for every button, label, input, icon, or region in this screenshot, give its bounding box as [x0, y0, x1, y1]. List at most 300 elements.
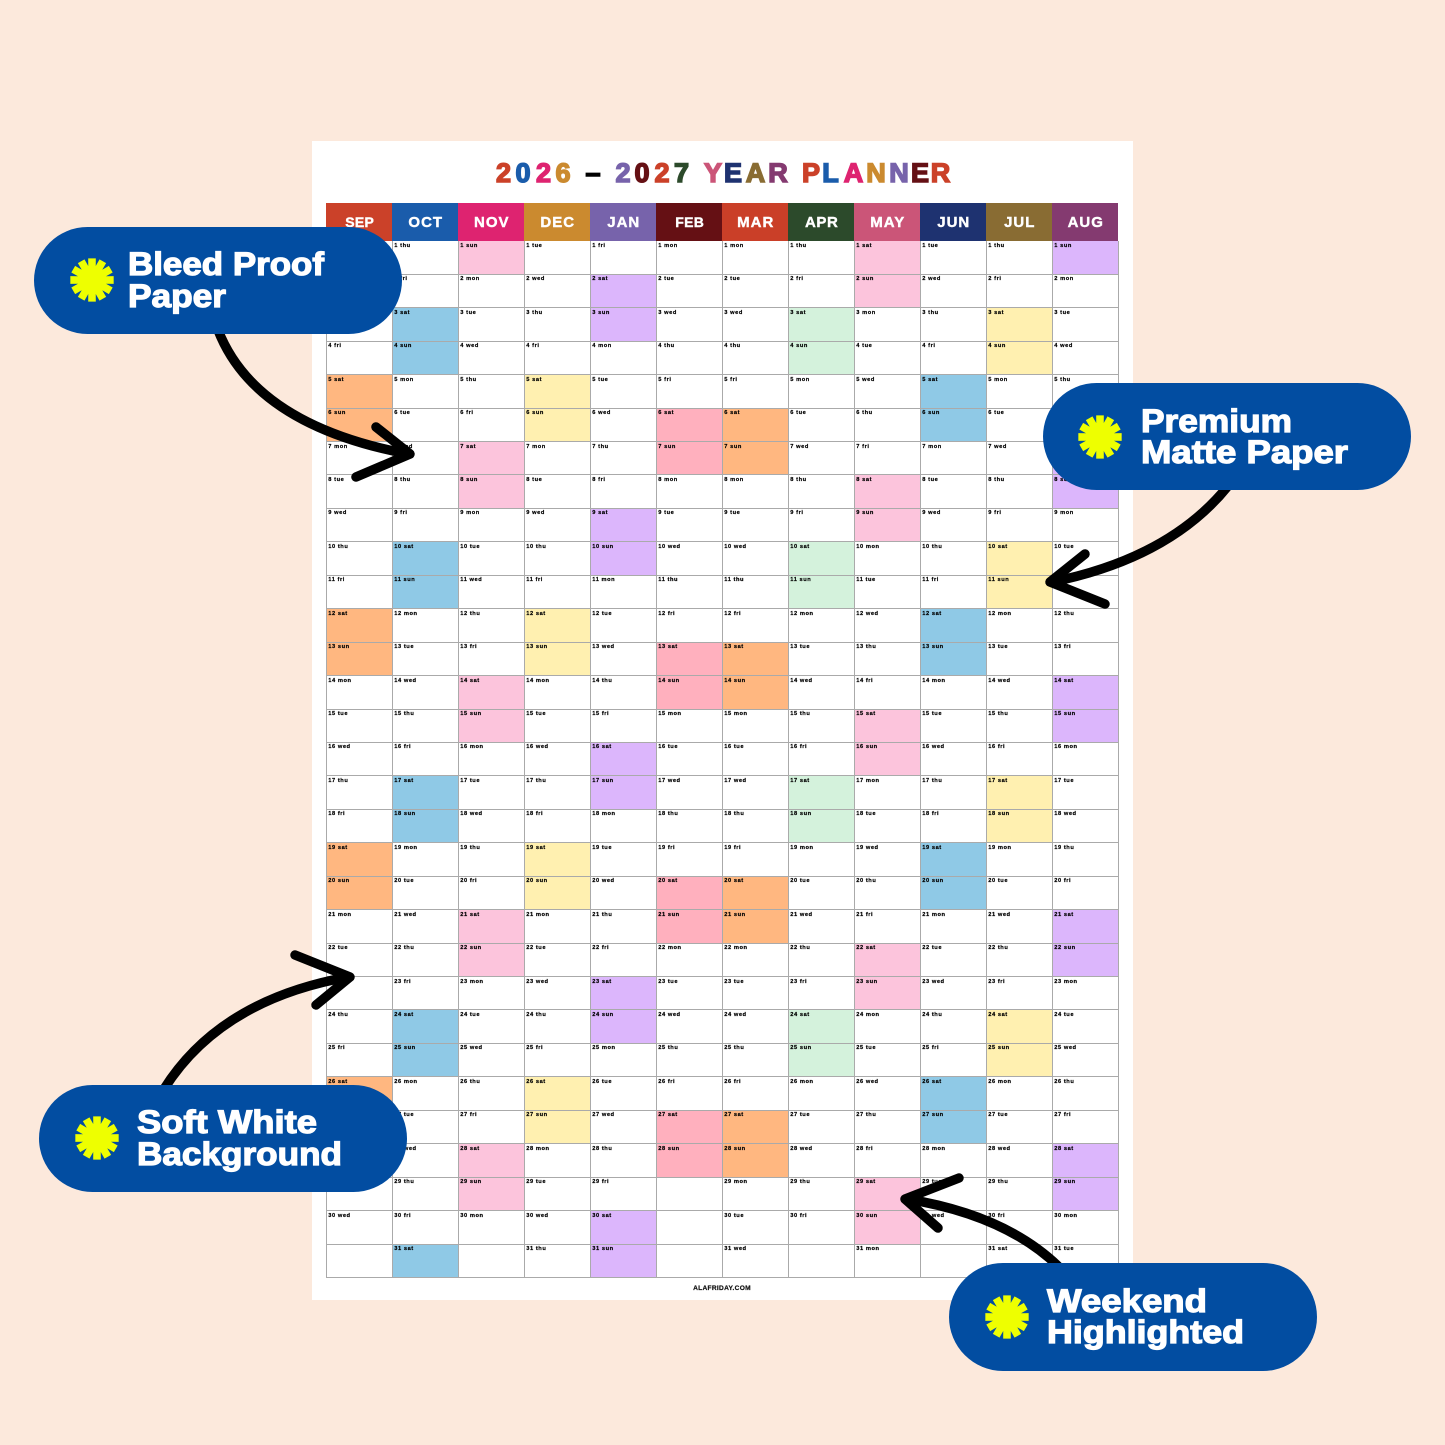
column: January: 3 sun — [592, 310, 610, 316]
title: P — [802, 158, 820, 188]
column: February: 19 fri — [658, 845, 675, 851]
column: May: 25 tue — [856, 1045, 876, 1051]
column: June: 18 fri — [922, 811, 939, 817]
column: June: 12 sat — [922, 611, 942, 617]
column: July: 4 sun — [988, 343, 1006, 349]
column: August: 14 sat — [1054, 678, 1074, 684]
column: December: 13 sun — [526, 644, 548, 650]
column: June: 23 wed — [922, 979, 945, 985]
column: July: 31 sat — [988, 1246, 1008, 1252]
column: December: 3 thu — [526, 310, 543, 316]
column: March: 15 mon — [724, 711, 748, 717]
column: April: 9 fri — [790, 510, 803, 516]
column: March: 9 tue — [724, 510, 740, 516]
column: November: 20 fri — [460, 878, 477, 884]
column: January: 8 fri — [592, 477, 605, 483]
column: November: 23 mon — [460, 979, 484, 985]
column: December: 21 mon — [526, 912, 550, 918]
column: July: 14 wed — [988, 678, 1011, 684]
column: October: 10 sat — [394, 544, 414, 550]
column: February: 13 sat — [658, 644, 678, 650]
column: December: 26 sat — [526, 1079, 546, 1085]
column: October: 21 wed — [394, 912, 417, 918]
column: July: 25 sun — [988, 1045, 1010, 1051]
column: April: 5 mon — [790, 377, 810, 383]
column: September: 2 wed — [328, 276, 347, 282]
column: November: 22 sun — [460, 945, 482, 951]
column: August: 30 mon — [1054, 1213, 1078, 1219]
column: January: 14 thu — [592, 678, 612, 684]
column: November — [458, 203, 524, 1278]
column: August: 24 tue — [1054, 1012, 1074, 1018]
column: August: 5 thu — [1054, 377, 1071, 383]
column: November: 16 mon — [460, 744, 484, 750]
column: October: 27 tue — [394, 1112, 414, 1118]
icon: yellow burst — [70, 258, 114, 302]
column: May: 19 wed — [856, 845, 879, 851]
column: April: 25 sun — [790, 1045, 812, 1051]
column: July: 23 fri — [988, 979, 1005, 985]
column: April: 6 tue — [790, 410, 806, 416]
column: May: 9 sun — [856, 510, 874, 516]
arrow: to paper from Soft White — [164, 955, 350, 1089]
column: February: 3 wed — [658, 310, 677, 316]
column: December: 27 sun — [526, 1112, 548, 1118]
column: March: 8 mon — [724, 477, 744, 483]
column: October: 7 wed — [394, 444, 413, 450]
column: September: 21 mon — [328, 912, 352, 918]
column: July: 22 thu — [988, 945, 1008, 951]
column: February: 5 fri — [658, 377, 671, 383]
column: September: 1 tue — [328, 243, 344, 249]
icon: yellow burst — [75, 1116, 119, 1160]
column: August: 15 sun — [1054, 711, 1076, 717]
column: February — [656, 203, 722, 1278]
column: November: 21 sat — [460, 912, 480, 918]
column: July: 15 thu — [988, 711, 1008, 717]
column: May: 7 fri — [856, 444, 869, 450]
column: September: 25 fri — [328, 1045, 345, 1051]
column: November: 14 sat — [460, 678, 480, 684]
column: June: 21 mon — [922, 912, 946, 918]
column: March: 7 sun — [724, 444, 742, 450]
column: April: 7 wed — [790, 444, 809, 450]
column: January: 12 tue — [592, 611, 612, 617]
column: October: 4 sun — [394, 343, 412, 349]
column: August: 31 tue — [1054, 1246, 1074, 1252]
column: March: 13 sat — [724, 644, 744, 650]
callout text: Highlighted — [1047, 1314, 1244, 1350]
column: March: 11 thu — [724, 577, 744, 583]
title: E — [911, 158, 929, 188]
column: November: 25 wed — [460, 1045, 483, 1051]
icon: yellow burst — [985, 1295, 1029, 1339]
column: July: 2 fri — [988, 276, 1001, 282]
column: April: 15 thu — [790, 711, 810, 717]
column: January: JAN — [607, 214, 640, 231]
column: March: 2 tue — [724, 276, 740, 282]
column: July: 28 wed — [988, 1146, 1011, 1152]
column: May — [854, 203, 920, 1278]
column: February: 24 wed — [658, 1012, 681, 1018]
column: September: 7 mon — [328, 444, 348, 450]
column: January: 19 tue — [592, 845, 612, 851]
column: January — [590, 203, 656, 1278]
column: December: 18 fri — [526, 811, 543, 817]
column: June: 10 thu — [922, 544, 942, 550]
title: Y — [704, 158, 722, 188]
column: September: 23 wed — [328, 979, 351, 985]
title: 0 — [634, 158, 650, 188]
column: July: 17 sat — [988, 778, 1008, 784]
column: November: 3 tue — [460, 310, 476, 316]
column: January: 1 fri — [592, 243, 605, 249]
column: January: 29 fri — [592, 1179, 609, 1185]
column: October: 18 sun — [394, 811, 416, 817]
column: February: 1 mon — [658, 243, 678, 249]
column: December: 11 fri — [526, 577, 543, 583]
column: August: AUG — [1068, 214, 1104, 231]
column: March: 3 wed — [724, 310, 743, 316]
column: May: 2 sun — [856, 276, 874, 282]
column: November: 6 fri — [460, 410, 473, 416]
column: October: 8 thu — [394, 477, 411, 483]
column: October: 26 mon — [394, 1079, 418, 1085]
column: August: 22 sun — [1054, 945, 1076, 951]
title: 7 — [674, 158, 689, 188]
column: February: 10 wed — [658, 544, 681, 550]
column: August: 13 fri — [1054, 644, 1071, 650]
column: November: 9 mon — [460, 510, 480, 516]
column: August: 25 wed — [1054, 1045, 1077, 1051]
column: August: 2 mon — [1054, 276, 1074, 282]
column: August: 20 fri — [1054, 878, 1071, 884]
column: June: 22 tue — [922, 945, 942, 951]
column: May: 13 thu — [856, 644, 876, 650]
callout text: Background — [137, 1136, 342, 1172]
column: September: 20 sun — [328, 878, 350, 884]
column: June: 30 wed — [922, 1213, 945, 1219]
column: September: 13 sun — [328, 644, 350, 650]
column: June: 11 fri — [922, 577, 939, 583]
column: March: 31 wed — [724, 1246, 747, 1252]
callout text: Bleed Proof — [128, 246, 324, 282]
callout text: Premium — [1141, 403, 1292, 439]
title: R — [931, 158, 950, 188]
callout: Bleed Proof Paper — [34, 227, 402, 334]
column: June: 13 sun — [922, 644, 944, 650]
column: January: 17 sun — [592, 778, 614, 784]
column: November: 29 sun — [460, 1179, 482, 1185]
column: March: 25 thu — [724, 1045, 744, 1051]
column: November: 5 thu — [460, 377, 477, 383]
column: January: 31 sun — [592, 1246, 614, 1252]
title: 2 — [536, 158, 551, 188]
callout: Premium Matte Paper — [1043, 383, 1411, 490]
title: – — [585, 158, 601, 188]
column: June: 8 tue — [922, 477, 938, 483]
column: December: 12 sat — [526, 611, 546, 617]
column: December: 19 sat — [526, 845, 546, 851]
column: May: 14 fri — [856, 678, 873, 684]
column: September: 9 wed — [328, 510, 347, 516]
column: November: 24 tue — [460, 1012, 480, 1018]
column: July: 6 tue — [988, 410, 1004, 416]
column: May: 28 fri — [856, 1146, 873, 1152]
column: October: 5 mon — [394, 377, 414, 383]
column: October: 13 tue — [394, 644, 414, 650]
title: 2 — [496, 158, 511, 188]
column: November: 10 tue — [460, 544, 480, 550]
column: August: 3 tue — [1054, 310, 1070, 316]
column: December: 7 mon — [526, 444, 546, 450]
callout text: Matte Paper — [1141, 434, 1348, 470]
column: December: 22 tue — [526, 945, 546, 951]
column: June: 9 wed — [922, 510, 941, 516]
column: May: 31 mon — [856, 1246, 880, 1252]
column: January: 13 wed — [592, 644, 615, 650]
column: October: 30 fri — [394, 1213, 411, 1219]
column: June: 28 mon — [922, 1146, 946, 1152]
panel: planner poster sheet — [312, 141, 1133, 1300]
title: A — [844, 158, 863, 188]
column: April: 20 tue — [790, 878, 810, 884]
column: July: 29 thu — [988, 1179, 1008, 1185]
column: April: 27 tue — [790, 1112, 810, 1118]
column: April: 19 mon — [790, 845, 814, 851]
column: March: 16 tue — [724, 744, 744, 750]
column: July: 13 tue — [988, 644, 1008, 650]
column: December: 20 sun — [526, 878, 548, 884]
callout text: Soft White — [137, 1104, 317, 1140]
column: October: 14 wed — [394, 678, 417, 684]
column: February: 21 sun — [658, 912, 680, 918]
column: February: 6 sat — [658, 410, 674, 416]
column: June: 1 tue — [922, 243, 938, 249]
column: September: 30 wed — [328, 1213, 351, 1219]
column: April: 3 sat — [790, 310, 806, 316]
column: November: 26 thu — [460, 1079, 480, 1085]
column: April: 22 thu — [790, 945, 810, 951]
column: July: 12 mon — [988, 611, 1012, 617]
column: March: 20 sat — [724, 878, 744, 884]
column: December: 2 wed — [526, 276, 545, 282]
column: August: 26 thu — [1054, 1079, 1074, 1085]
arrow: to paper from Bleed Proof — [218, 330, 410, 477]
column: July: 16 fri — [988, 744, 1005, 750]
column: June: JUN — [937, 214, 970, 231]
column: September: 4 fri — [328, 343, 341, 349]
column: May: 16 sun — [856, 744, 878, 750]
column: January: 22 fri — [592, 945, 609, 951]
column: April: 4 sun — [790, 343, 808, 349]
column: October: 2 fri — [394, 276, 407, 282]
column: May: 6 thu — [856, 410, 873, 416]
column: April: 16 fri — [790, 744, 807, 750]
column: June: 7 mon — [922, 444, 942, 450]
column: May: MAY — [870, 214, 905, 231]
column: March: 5 fri — [724, 377, 737, 383]
column: August: 4 wed — [1054, 343, 1073, 349]
column: February: 2 tue — [658, 276, 674, 282]
column: January: 10 sun — [592, 544, 614, 550]
column: April: 2 fri — [790, 276, 803, 282]
column: June: 25 fri — [922, 1045, 939, 1051]
column: February: 26 fri — [658, 1079, 675, 1085]
column: August: 19 thu — [1054, 845, 1074, 851]
column: March: 26 fri — [724, 1079, 741, 1085]
column: March: 30 tue — [724, 1213, 744, 1219]
column: March: 4 thu — [724, 343, 741, 349]
column: May: 12 wed — [856, 611, 879, 617]
column: May: 22 sat — [856, 945, 876, 951]
column: September: 28 mon — [328, 1146, 352, 1152]
column: January: 25 mon — [592, 1045, 616, 1051]
column: April: 17 sat — [790, 778, 810, 784]
column: February: 16 tue — [658, 744, 678, 750]
title: 2 — [615, 158, 631, 188]
column: March: 22 mon — [724, 945, 748, 951]
column: February: 28 sun — [658, 1146, 680, 1152]
column: August: 21 sat — [1054, 912, 1074, 918]
column: March: 18 thu — [724, 811, 744, 817]
arrow: to paper from Premium Matte — [1050, 486, 1228, 604]
column: August: 28 sat — [1054, 1146, 1074, 1152]
column: January: 6 wed — [592, 410, 611, 416]
column: April: 21 wed — [790, 912, 813, 918]
column: October: 15 thu — [394, 711, 414, 717]
column: May: 26 wed — [856, 1079, 879, 1085]
column: May: 29 sat — [856, 1179, 876, 1185]
column: March: 23 tue — [724, 979, 744, 985]
column: February: 15 mon — [658, 711, 682, 717]
column: November: 13 fri — [460, 644, 477, 650]
column: December: 25 fri — [526, 1045, 543, 1051]
column: March: 6 sat — [724, 410, 740, 416]
column: October: 9 fri — [394, 510, 407, 516]
column: June: 6 sun — [922, 410, 940, 416]
column: July: 1 thu — [988, 243, 1005, 249]
column: November: 11 wed — [460, 577, 482, 583]
column: November: 28 sat — [460, 1146, 480, 1152]
column: October: 31 sat — [394, 1246, 414, 1252]
column: January: 30 sat — [592, 1213, 612, 1219]
column: February: 9 tue — [658, 510, 674, 516]
arrow: to weekend cell — [905, 1178, 1058, 1266]
column: July: 27 tue — [988, 1112, 1008, 1118]
column: January: 28 thu — [592, 1146, 612, 1152]
column: October: 3 sat — [394, 310, 410, 316]
column: August: 12 thu — [1054, 611, 1074, 617]
column: January: 11 mon — [592, 577, 615, 583]
column: August — [1052, 203, 1119, 1263]
column: December: 5 sat — [526, 377, 542, 383]
column: November: 19 thu — [460, 845, 480, 851]
column: January: 23 sat — [592, 979, 612, 985]
column: June: 16 wed — [922, 744, 945, 750]
column: February: 22 mon — [658, 945, 682, 951]
calendar grid — [326, 203, 1119, 1278]
column: December: DEC — [540, 214, 575, 231]
column: February: 11 thu — [658, 577, 678, 583]
column: September: 6 sun — [328, 410, 346, 416]
column: October: 1 thu — [394, 243, 411, 249]
column: April — [788, 203, 854, 1278]
column: April: 23 fri — [790, 979, 807, 985]
column: July: JUL — [1004, 214, 1035, 231]
column: May: 30 sun — [856, 1213, 878, 1219]
column: July: 24 sat — [988, 1012, 1008, 1018]
column: May: 10 mon — [856, 544, 880, 550]
title: 0 — [515, 158, 531, 188]
column: August: 6 fri — [1054, 410, 1067, 416]
title: 6 — [555, 158, 571, 188]
title: A — [746, 158, 765, 188]
column: May: 4 tue — [856, 343, 872, 349]
column: September: 11 fri — [328, 577, 345, 583]
column: March: 19 fri — [724, 845, 741, 851]
title: 2 — [654, 158, 670, 188]
column: November: 12 thu — [460, 611, 480, 617]
column: November: 2 mon — [460, 276, 480, 282]
column: December: 6 sun — [526, 410, 544, 416]
column: December: 14 mon — [526, 678, 550, 684]
column: March: 1 mon — [724, 243, 744, 249]
column: May: 8 sat — [856, 477, 872, 483]
column: December — [524, 203, 590, 1278]
column: August: 7 sat — [1054, 444, 1070, 450]
callout text: Paper — [128, 278, 226, 314]
column: June: 15 tue — [922, 711, 942, 717]
column: October: 25 sun — [394, 1045, 416, 1051]
column: June — [920, 203, 986, 1278]
column: November: 27 fri — [460, 1112, 477, 1118]
column: February: 8 mon — [658, 477, 678, 483]
column: May: 27 thu — [856, 1112, 876, 1118]
column: August: 17 tue — [1054, 778, 1074, 784]
column: October: 17 sat — [394, 778, 414, 784]
column: October: 12 mon — [394, 611, 418, 617]
callout: Soft White Background — [39, 1085, 407, 1192]
column: April: 24 sat — [790, 1012, 810, 1018]
column: June: 26 sat — [922, 1079, 942, 1085]
column: March: MAR — [737, 214, 774, 231]
column: June: 27 sun — [922, 1112, 944, 1118]
column: April: 12 mon — [790, 611, 814, 617]
column: August: 11 wed — [1054, 577, 1076, 583]
column: September: 22 tue — [328, 945, 348, 951]
column: May: 1 sat — [856, 243, 872, 249]
column: January: 18 mon — [592, 811, 616, 817]
column: August: 16 mon — [1054, 744, 1078, 750]
column: September: 14 mon — [328, 678, 352, 684]
column: July: 10 sat — [988, 544, 1008, 550]
column: September: 10 thu — [328, 544, 348, 550]
column: April: 10 sat — [790, 544, 810, 550]
column: January: 5 tue — [592, 377, 608, 383]
column: June: 29 tue — [922, 1179, 942, 1185]
column: July: 21 wed — [988, 912, 1011, 918]
column: November: 1 sun — [460, 243, 478, 249]
callout text: Weekend — [1047, 1283, 1207, 1319]
column: September: 3 thu — [328, 310, 345, 316]
column: February: 4 thu — [658, 343, 675, 349]
column: November: 18 wed — [460, 811, 483, 817]
column: January: 20 wed — [592, 878, 615, 884]
column: December: 1 tue — [526, 243, 542, 249]
column: September: 12 sat — [328, 611, 348, 617]
column: December: 8 tue — [526, 477, 542, 483]
